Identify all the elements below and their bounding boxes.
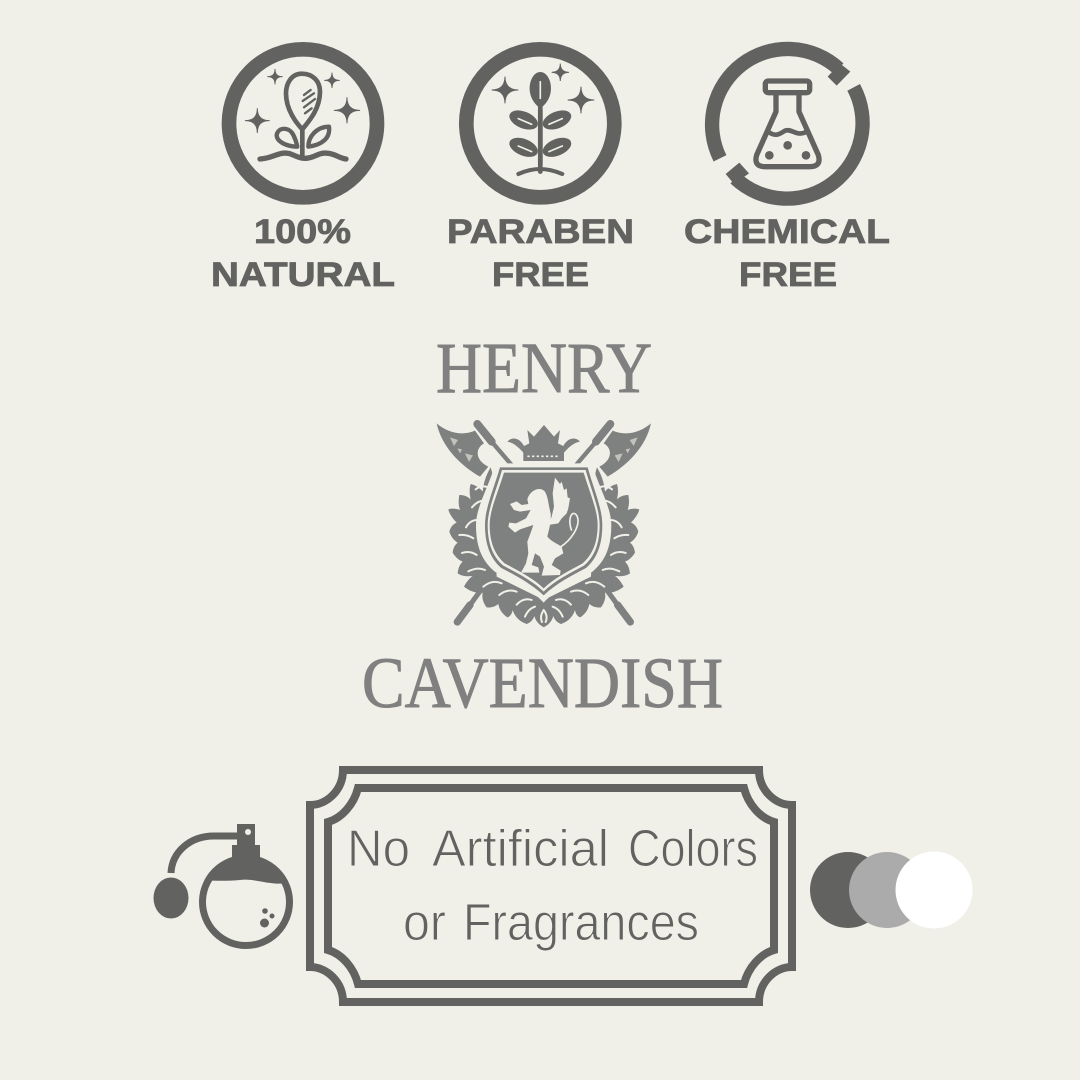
label: 100% natural: NATURAL: [211, 256, 395, 294]
callout: no artificial colors or fragrances: Artificial: [432, 820, 609, 878]
callout: no artificial colors or fragrances: or: [403, 894, 446, 952]
crest: griffin shield with crossed axes and wreath: [437, 423, 651, 627]
brand name: Cavendish: CAVENDISH: [362, 643, 723, 723]
panel: chemical free badge: [684, 49, 890, 294]
icon: colour swatches: [810, 852, 972, 928]
crest: griffin: [508, 478, 578, 576]
label: paraben free: [447, 213, 634, 294]
crest: crown: [507, 425, 580, 461]
crest: right axe and wreath: [544, 423, 651, 627]
panel: ornate double frame: [310, 770, 792, 1002]
panel: paraben free badge: [447, 49, 634, 294]
label: paraben free: PARABEN: [447, 213, 634, 251]
label: chemical free: [684, 213, 890, 294]
label: chemical free: FREE: [739, 256, 837, 294]
label: paraben free: FREE: [492, 256, 589, 294]
icon: plant with leaves in ring: [466, 49, 614, 197]
label: chemical free: CHEMICAL: [684, 213, 890, 251]
icon: flask in broken ring: [712, 49, 863, 199]
crest: shield: [476, 463, 611, 603]
callout: no artificial colors or fragrances: Fragrances: [463, 894, 699, 952]
icon: sprouting leaf in ring: [229, 49, 377, 197]
callout: no artificial colors or fragrances: No: [347, 820, 410, 878]
label: 100% natural: 100%: [254, 213, 351, 251]
brand name: Henry: HENRY: [436, 328, 652, 408]
icon: perfume atomizer bottle: [154, 824, 290, 946]
panel: 100% natural badge: [211, 49, 395, 294]
label: 100% natural: [211, 213, 395, 294]
callout: no artificial colors or fragrances: [347, 820, 758, 952]
callout: no artificial colors or fragrances: Colors: [628, 820, 758, 878]
crest: left axe and wreath: [437, 423, 544, 627]
